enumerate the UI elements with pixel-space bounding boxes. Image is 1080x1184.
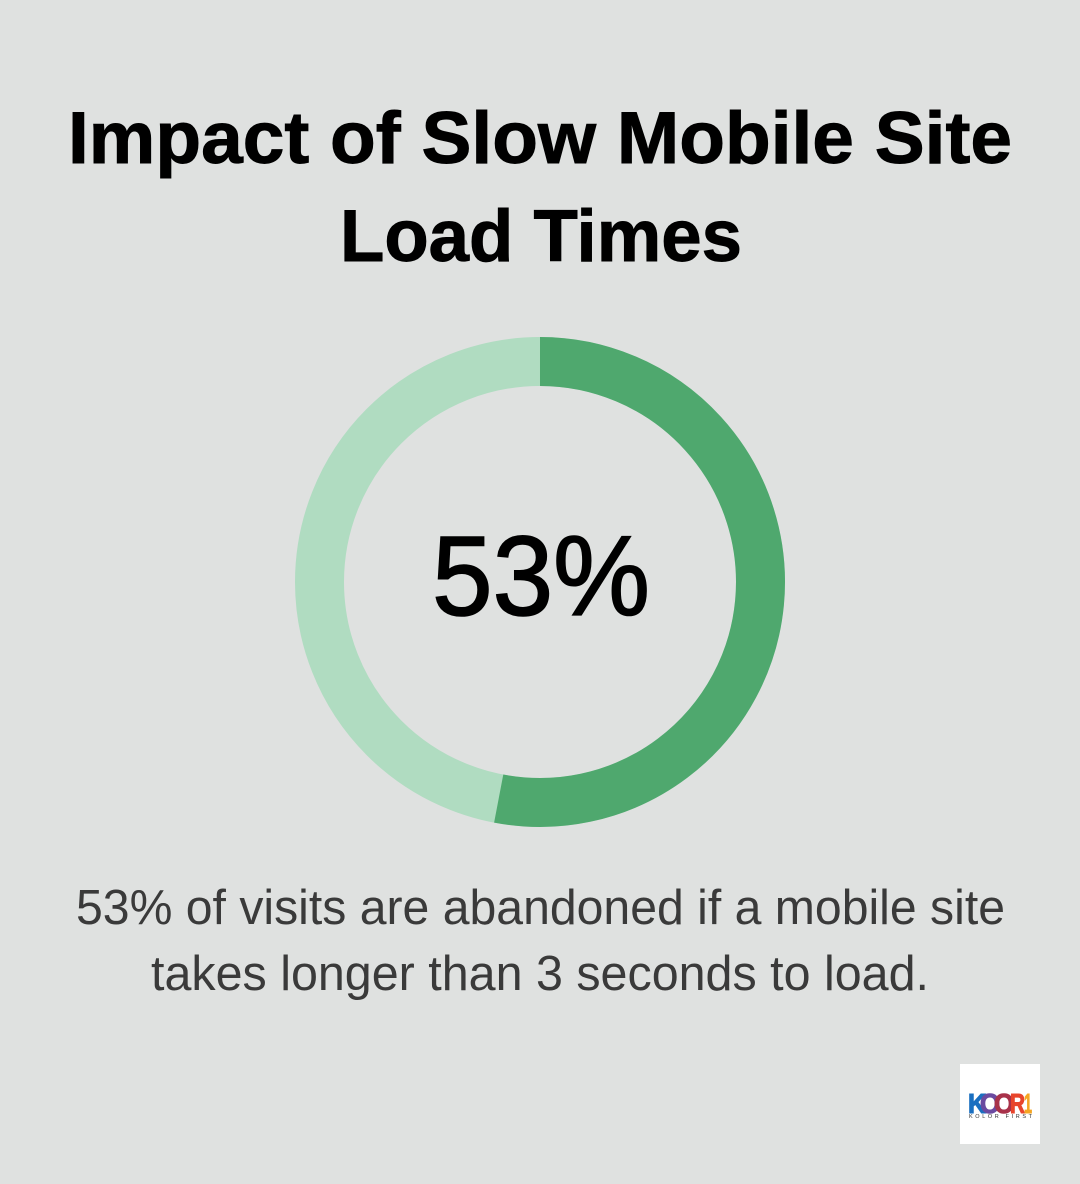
description: takes longer than 3 seconds to load.	[151, 947, 929, 1001]
logo: Koori Kolor First	[960, 1064, 1040, 1144]
title: Load Times	[340, 196, 742, 277]
logo wordmark: O	[994, 1088, 1014, 1119]
title: Impact of Slow Mobile Site	[68, 98, 1012, 179]
title	[68, 98, 1012, 277]
logo background	[960, 1064, 1040, 1144]
description: 53% of visits are abandoned if a mobile site	[76, 881, 1005, 935]
logo wordmark	[968, 1088, 1032, 1119]
donut centre value: 53%	[432, 513, 650, 639]
donut chart: 53%	[320, 362, 760, 803]
logo wordmark: K	[968, 1088, 986, 1119]
logo wordmark: O	[980, 1088, 1000, 1119]
donut value arc	[499, 362, 760, 803]
description	[76, 881, 1005, 1001]
logo wordmark: R	[1010, 1088, 1025, 1119]
logo wordmark: 1	[1024, 1088, 1032, 1119]
logo tagline: KOLOR FIRST	[969, 1114, 1033, 1120]
donut track	[320, 362, 760, 802]
